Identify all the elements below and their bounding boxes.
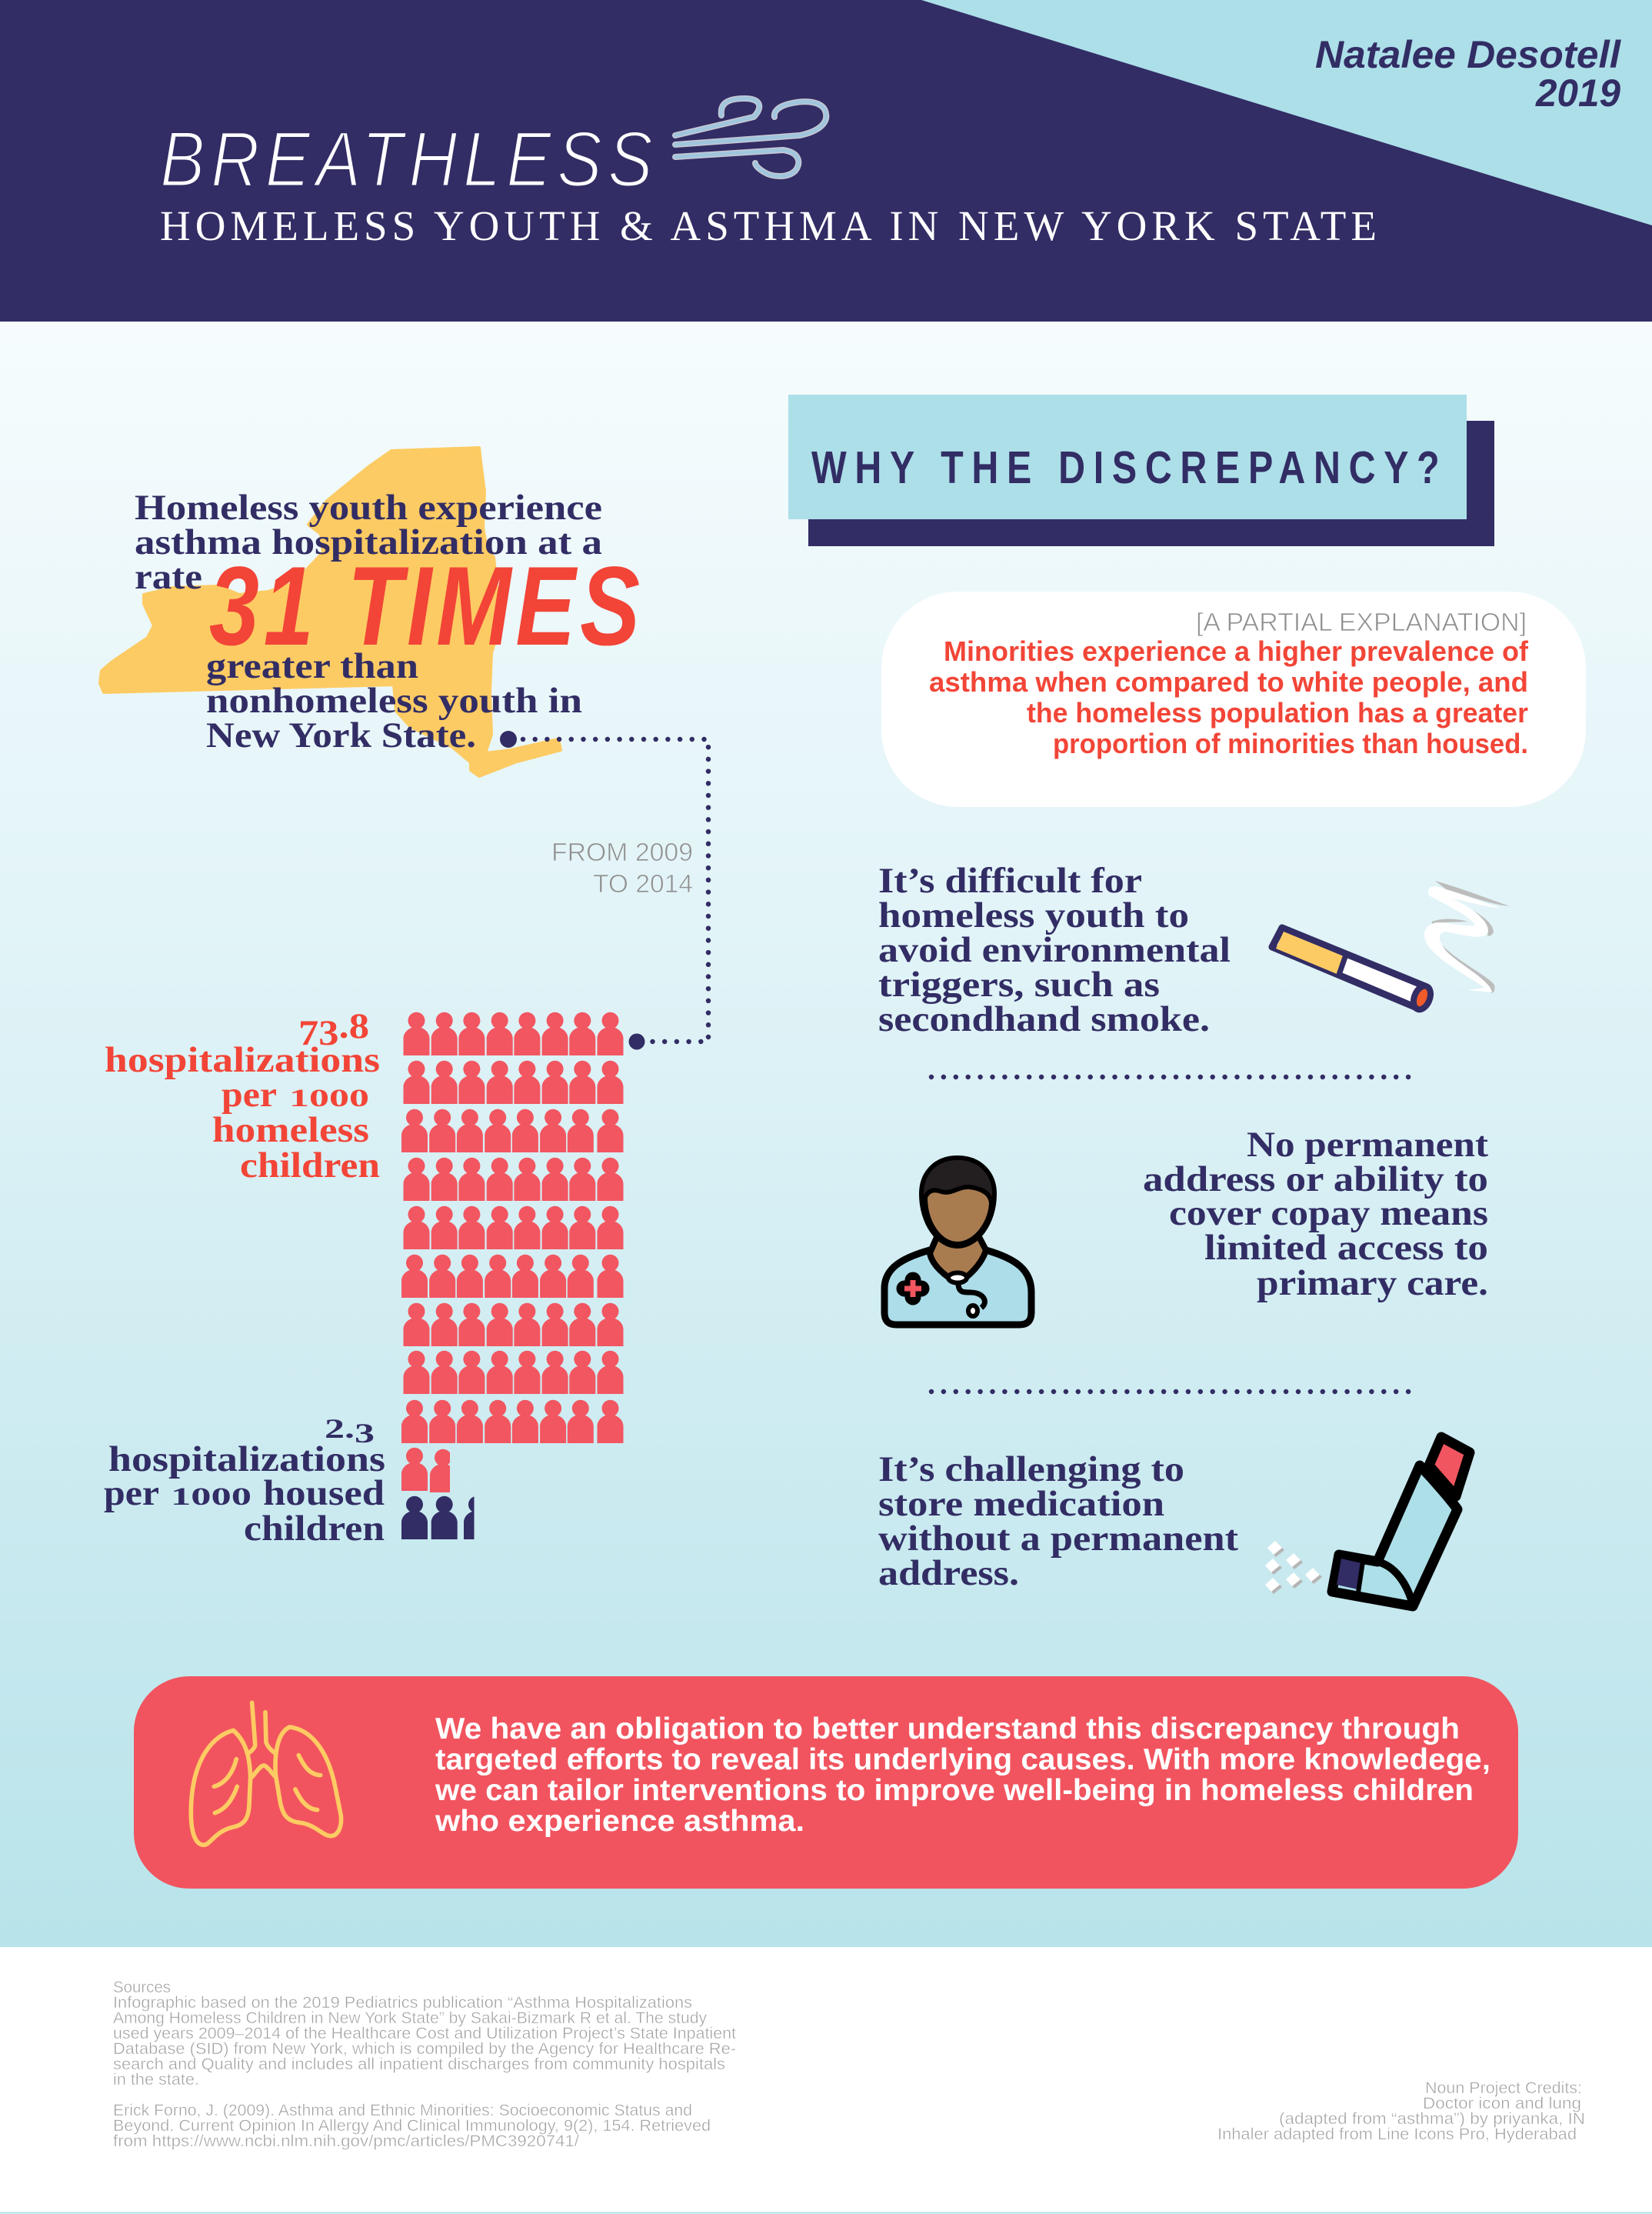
- text: primary care: address or ability to: [1143, 1159, 1488, 1199]
- text: medication storage: without a permanent: [878, 1519, 1238, 1559]
- label: housed children rate: 2.: [325, 1413, 345, 1444]
- statistic text block: Homeless youth experience: [135, 488, 602, 528]
- statistic text block: rate: [135, 557, 202, 597]
- sources text: in the state.: [113, 2071, 199, 2089]
- icon: cigarette and smoke: [1272, 881, 1510, 1012]
- text: medication storage: address.: [878, 1553, 1019, 1593]
- label: homeless children rate: hospitalizations: [105, 1040, 380, 1080]
- divider dots: [931, 1389, 1411, 1394]
- callout: partial explanation: [A PARTIAL EXPLANATION]: [1196, 608, 1527, 636]
- sources text: used years 2009–2014 of the Healthcare Cost and Utilization Project’s State Inpatient: [113, 2025, 736, 2042]
- statistic text block: [135, 488, 602, 755]
- callout: partial explanation: asthma when compared to white people, and: [929, 666, 1528, 698]
- label: homeless children rate: 73: [298, 1013, 339, 1053]
- label: housed children rate: housed: [263, 1473, 385, 1513]
- date range label: TO 2014: [593, 869, 693, 898]
- map: New York State: [100, 448, 561, 776]
- call to action text: [435, 1712, 1490, 1838]
- label: housed children rate: [104, 1413, 385, 1549]
- text: primary care: cover copay means: [1169, 1193, 1488, 1233]
- background gradient: [0, 322, 1652, 1947]
- text: environmental triggers: It’s difficult for: [878, 861, 1142, 901]
- callout: partial explanation: proportion of minorities than housed.: [1053, 728, 1528, 759]
- divider dots: [931, 1075, 1411, 1079]
- connector: dotted line: [500, 731, 708, 1049]
- sources text: Sources: [113, 1979, 171, 1996]
- label: homeless children rate: children: [240, 1145, 380, 1185]
- label: homeless children rate: [105, 1006, 380, 1185]
- text: primary care: [1143, 1125, 1488, 1303]
- title: BREATHLESS: [160, 116, 653, 204]
- heading: why the discrepancy: [788, 395, 1494, 546]
- text: primary care: No permanent: [1247, 1125, 1488, 1165]
- text: medication storage: [878, 1449, 1238, 1593]
- sources text: search and Quality and includes all inpatient discharges from community hospitals: [113, 2056, 725, 2073]
- sources text: Database (SID) from New York, which is compiled by the Agency for Healthcare Re-: [113, 2040, 736, 2058]
- corner triangle: [921, 0, 1652, 225]
- label: housed children rate: 3: [355, 1418, 375, 1449]
- heading: why the discrepancy: WHY THE DISCREPANCY?: [811, 443, 1440, 493]
- icon: lungs: [191, 1702, 341, 1845]
- text: environmental triggers: homeless youth to: [878, 895, 1189, 935]
- text: medication storage: store medication: [878, 1484, 1164, 1524]
- noun project credits: Doctor icon and lung: [1423, 2095, 1581, 2112]
- noun project credits: [1217, 2079, 1585, 2143]
- call to action text: We have an obligation to better understand this discrepancy through: [435, 1712, 1460, 1746]
- header banner: [0, 0, 1652, 322]
- icon: wind: [675, 98, 826, 176]
- sources text: [113, 1979, 736, 2150]
- label: housed children rate: per: [104, 1473, 159, 1513]
- noun project credits: Noun Project Credits:: [1425, 2079, 1582, 2097]
- text: environmental triggers: avoid environmental: [878, 930, 1231, 970]
- label: homeless children rate: .8: [339, 1006, 369, 1046]
- sources text: from https://www.ncbi.nlm.nih.gov/pmc/articles/PMC3920741/: [113, 2132, 579, 2150]
- noun project credits: (adapted from “asthma”) by priyanka, IN: [1279, 2110, 1585, 2128]
- author credit: [1315, 33, 1621, 115]
- text: environmental triggers: [878, 861, 1231, 1039]
- text: environmental triggers: secondhand smoke.: [878, 999, 1210, 1039]
- date range label: FROM 2009: [551, 838, 693, 866]
- call to action text: who experience asthma.: [435, 1805, 804, 1838]
- call to action text: targeted efforts to reveal its underlying causes. With more knowledege,: [435, 1743, 1490, 1776]
- date range label: [551, 838, 693, 898]
- callout: partial explanation: [881, 592, 1586, 807]
- sources text: Infographic based on the 2019 Pediatrics publication “Asthma Hospitalizations: [113, 1994, 692, 2012]
- callout: partial explanation: Minorities experience a higher prevalence of: [944, 635, 1529, 667]
- call to action text: we can tailor interventions to improve well-being in homeless children: [435, 1774, 1474, 1807]
- callout: partial explanation: the homeless population has a greater: [1027, 697, 1528, 729]
- footer background: [0, 1947, 1652, 2214]
- text: medication storage: It’s challenging to: [878, 1449, 1184, 1489]
- subtitle: HOMELESS YOUTH & ASTHMA IN NEW YORK STATE: [160, 202, 1377, 249]
- label: homeless children rate: homeless: [212, 1110, 369, 1150]
- icon: doctor: [884, 1158, 1031, 1325]
- pictogram: homeless children hospitalizations: [401, 1012, 623, 1492]
- panel: call to action: [134, 1676, 1518, 1889]
- author credit: 2019: [1535, 72, 1620, 115]
- label: homeless children rate: per: [221, 1075, 277, 1115]
- statistic text block: New York State.: [206, 715, 476, 755]
- label: housed children rate: 1000: [171, 1483, 251, 1511]
- statistic text block: nonhomeless youth in: [206, 681, 582, 721]
- text: environmental triggers: triggers, such as: [878, 965, 1160, 1005]
- label: housed children rate: children: [244, 1509, 385, 1549]
- noun project credits: Inhaler adapted from Line Icons Pro, Hyderabad: [1217, 2126, 1577, 2143]
- label: housed children rate: hospitalizations: [108, 1439, 385, 1479]
- key figure: 31 times: 31 TIMES: [209, 544, 640, 669]
- sources text: Among Homeless Children in New York State” by Sakai-Bizmark R et al. The study: [113, 2009, 708, 2027]
- author credit: Natalee Desotell: [1315, 33, 1621, 76]
- label: homeless children rate: 1000: [289, 1085, 369, 1112]
- statistic text block: asthma hospitalization at a: [135, 522, 602, 562]
- statistic text block: greater than: [206, 646, 418, 686]
- sources text: Beyond. Current Opinion In Allergy And Clinical Immunology, 9(2), 154. Retrieved: [113, 2117, 711, 2135]
- pictogram: housed children hospitalizations: [401, 1495, 474, 1539]
- sources text: Erick Forno, J. (2009). Asthma and Ethnic Minorities: Socioeconomic Status and: [113, 2102, 692, 2119]
- text: primary care: limited access to: [1204, 1228, 1488, 1268]
- icon: inhaler: [1265, 1437, 1470, 1606]
- text: primary care: primary care.: [1257, 1263, 1488, 1303]
